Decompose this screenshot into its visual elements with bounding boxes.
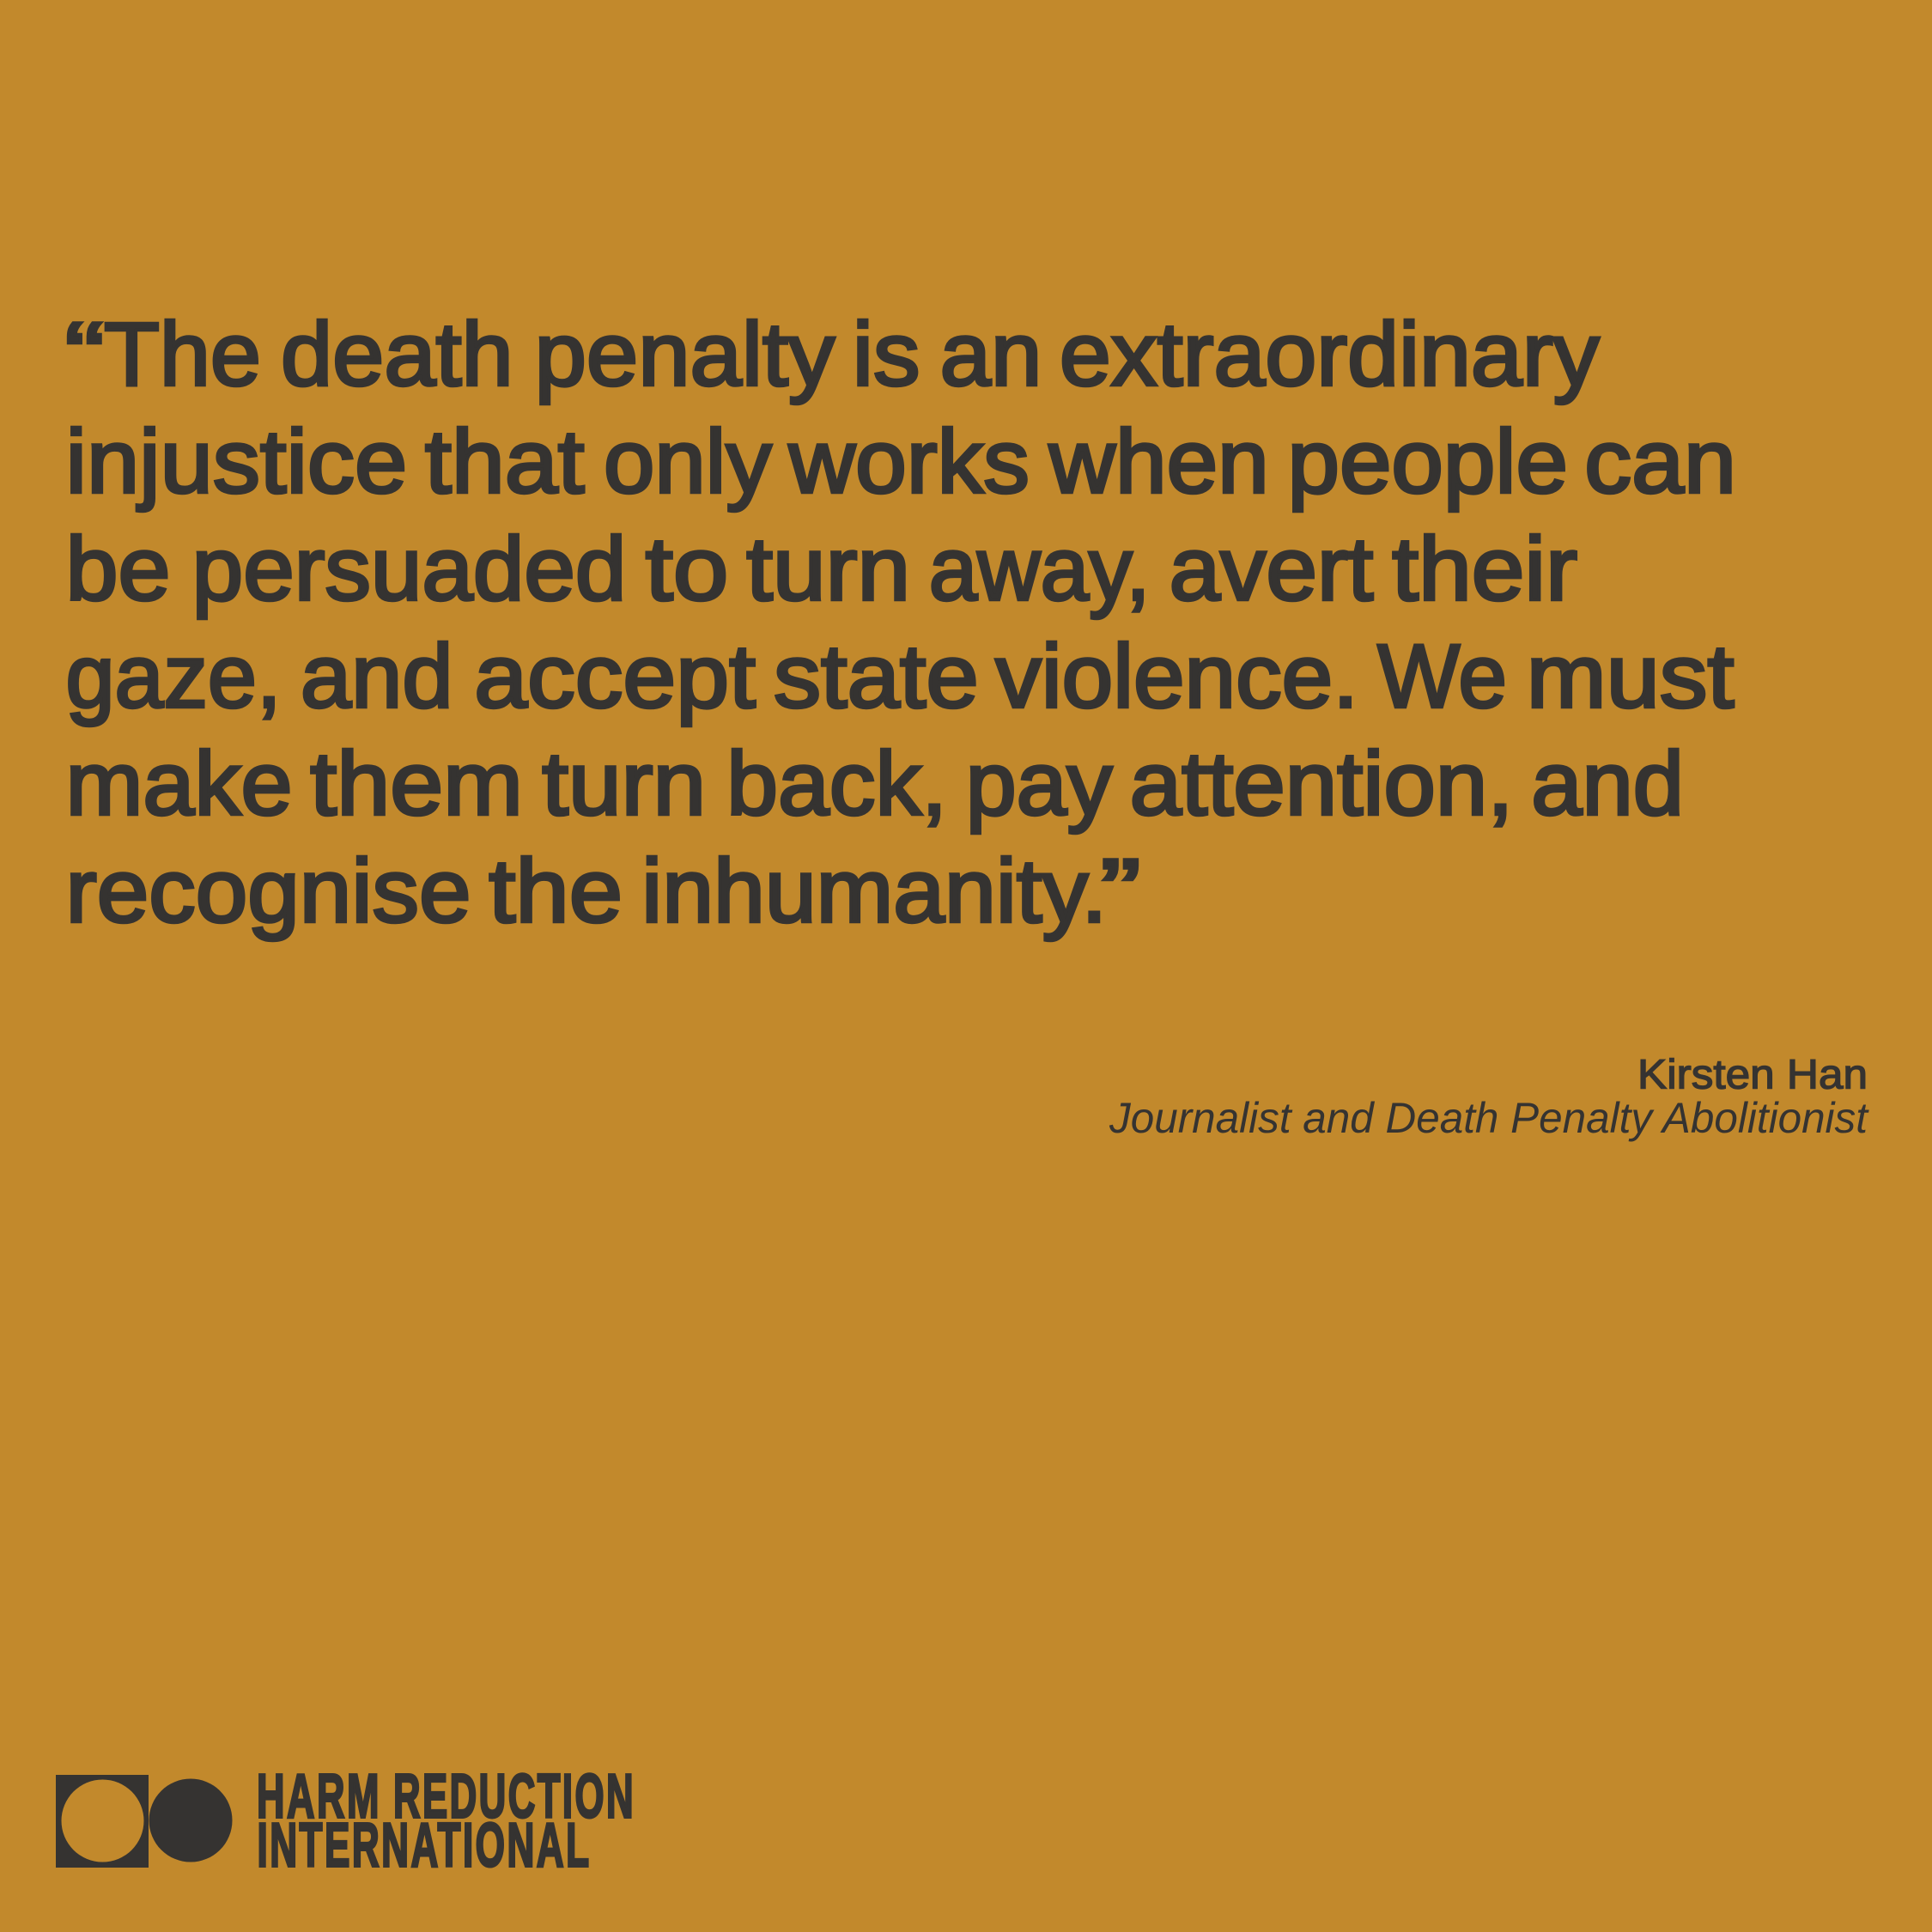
quote text: violence. (995, 626, 1358, 726)
logo wordmark: HARM (257, 1762, 381, 1831)
quote text: attention, (1130, 733, 1513, 834)
quote text: pay (966, 733, 1113, 834)
quote text: and (301, 626, 453, 726)
quote text: inhumanity. (641, 841, 1107, 941)
quote text: to (646, 519, 728, 619)
logo: Harm Reduction International (56, 1762, 635, 1880)
icon: square with circle cut-out (56, 1775, 149, 1868)
attribution name: Kirsten Han (1637, 1052, 1868, 1097)
quote text: We (1377, 626, 1507, 726)
quote text: an (940, 304, 1042, 404)
quote text: gaze, (65, 626, 282, 726)
quote text: “ (64, 304, 105, 404)
quote text: people (1288, 411, 1568, 512)
icon: solid circle (149, 1779, 232, 1862)
logo wordmark: REDUCTION (393, 1762, 635, 1831)
quote text: ” (1100, 841, 1141, 941)
quote text: their (1392, 519, 1577, 619)
quote text: works (788, 411, 1030, 512)
quote text: make (65, 733, 292, 834)
attribution (1109, 1052, 1869, 1142)
quote text: The (104, 304, 261, 404)
logo wordmark (257, 1762, 635, 1880)
quote text: turn (542, 733, 706, 834)
quote text: and (1531, 733, 1684, 834)
quote text: injustice (65, 411, 407, 512)
quote text: extraordinary (1060, 304, 1600, 404)
quote text: avert (1170, 519, 1373, 619)
quote text: penalty (535, 304, 835, 404)
quote text (64, 304, 1736, 941)
quote text: when (1048, 411, 1269, 512)
quote text: state (774, 626, 979, 726)
quote text: death (281, 304, 513, 404)
quote text: turn (746, 519, 910, 619)
quote text: them (310, 733, 523, 834)
quote text: persuaded (192, 519, 626, 619)
quote text: can (1584, 411, 1736, 512)
quote text: only (604, 411, 772, 512)
quote text: away, (929, 519, 1151, 619)
quote text: the (489, 841, 623, 941)
quote text: must (1527, 626, 1735, 726)
logo wordmark: INTERNATIONAL (258, 1812, 591, 1880)
quote text: be (65, 519, 170, 619)
quote text: back, (726, 733, 947, 834)
quote text: that (425, 411, 585, 512)
quote text: accept (474, 626, 756, 726)
quote text: is (853, 304, 920, 404)
quote text: recognise (65, 841, 471, 941)
attribution role: Journalist and Death Penalty Abolitionist (1109, 1094, 1869, 1142)
